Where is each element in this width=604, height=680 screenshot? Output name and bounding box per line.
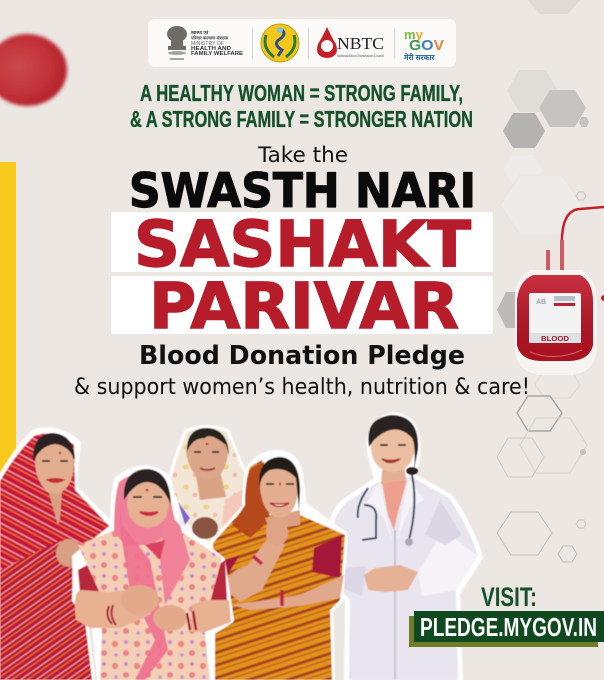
ministry text: परिवार कल्याण मंत्रालय (190, 34, 229, 40)
person: woman in pink and cream sari (75, 468, 231, 680)
title band: sashakt: SASHAKT (134, 208, 471, 281)
ministry text: FAMILY WELFARE (191, 51, 244, 57)
icon: blood bag: BLOOD (541, 334, 570, 343)
icon: NBTC blood drop (317, 27, 337, 58)
person: woman in pale sari (170, 428, 247, 548)
icon: national emblem (167, 26, 187, 60)
subtitle: support line: & support women’s health, nutrition & care! (74, 375, 530, 400)
ministry text: स्वास्थ्य एवं (190, 30, 209, 35)
NBTC wordmark: NBTC (337, 34, 384, 53)
icon: red dot at edge (601, 295, 604, 301)
ministry text: MINISTRY OF (191, 41, 224, 47)
text: take the: Take the (257, 143, 348, 167)
person: woman in red striped sari (0, 430, 113, 680)
title band: parivar: PARIVAR (149, 270, 459, 343)
people group (0, 415, 480, 680)
headline: A HEALTHY WOMAN = STRONG FAMILY, (140, 80, 463, 106)
subtitle: pledge: Blood Donation Pledge (139, 341, 465, 371)
person: doctor (333, 415, 480, 680)
hexagon cluster: top right (497, 0, 589, 398)
logo card (148, 19, 456, 67)
headline: & A STRONG FAMILY = STRONGER NATION (130, 106, 473, 132)
person: woman in orange sari (208, 453, 345, 680)
mygov logo: my (404, 27, 424, 42)
headline (130, 80, 473, 132)
mygov logo: GOV (409, 37, 444, 54)
icon: round crest (261, 24, 299, 62)
icon: blurred blood cell (0, 34, 67, 106)
hexagon cluster: lower right (497, 396, 587, 562)
ministry text: HEALTH AND (191, 46, 231, 52)
yellow side bar (0, 162, 16, 477)
NBTC wordmark: National Blood Transfusion Council (337, 54, 384, 58)
mygov logo: मेरी सरकार (403, 53, 435, 62)
title: swasth nari: SWASTH NARI (129, 164, 476, 219)
icon: blood bag: AB (536, 299, 546, 306)
icon: blood bag (515, 207, 604, 375)
mygov logo (403, 27, 444, 62)
ministry text (190, 30, 244, 57)
text: visit: VISIT: (481, 582, 537, 612)
